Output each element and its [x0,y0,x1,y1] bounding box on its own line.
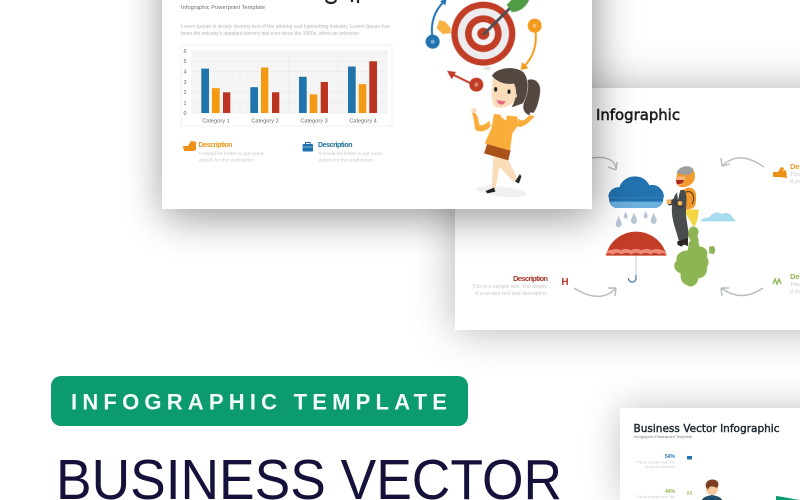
description: red left: Description [513,274,548,283]
slide heading fragment [326,0,358,3]
marker 3: orange [521,19,542,70]
character: girl [471,68,540,199]
description: red left: This is a sample text. You simply [472,284,547,290]
stat: 44 percent [637,489,676,499]
icon: green people [773,279,781,284]
description: red left: d your own text and description [475,291,547,297]
description: orange: details for this stuff better. [199,158,255,164]
slide subtitle: Infographic Powerpoint Template [634,435,692,439]
stat: 54 percent: This is a sample text. You [637,460,675,464]
intro paragraph: Lorem Ipsum is simply dummy text of the printing and typesetting industry. Lorem Ipsum has [181,24,390,30]
skirt [484,143,511,160]
stat: 44 percent: 44% [665,489,676,495]
description: blue: It would be better to put some [318,151,383,157]
axis numbers: 1 [184,101,186,107]
icon: green smoke trail [674,227,709,286]
icon: pale blue cloud [700,212,735,221]
axis numbers: 6 [184,49,186,55]
icon: jetpack man [667,166,696,247]
intro paragraph: been the industry's standard dummy text ever since the 1500s, when an unknown [181,31,359,37]
description: orange right [790,162,800,185]
arrow in target [483,0,520,35]
category labels: Category 1 [202,118,230,124]
icon: target [437,0,530,70]
icon: curved arrow top right [721,158,764,167]
ponytail [523,79,540,115]
bars: orange series [212,68,366,113]
marker 1: blue [426,0,447,49]
bar chart [181,45,392,126]
description: blue: details for this stuff better. [318,158,374,164]
intro paragraph [181,24,390,37]
marker 4: red [447,71,483,92]
description: blue [302,142,383,164]
icon: blue briefcase [687,456,692,460]
panel: slide preview with jetpack man [455,88,800,330]
illustration: cloud, umbrella and jetpack man [605,166,735,286]
icon: curved arrow bottom left [574,288,616,296]
slide subtitle: Infographic Powerpoint Template [181,5,265,11]
description: orange: It would be better to put some [199,151,264,157]
panel: slide preview with bar chart and girl [162,0,592,209]
icon: orange thumbs up [773,167,787,178]
icon: orange thumbs up [183,141,196,151]
description: red left [472,274,548,297]
illustration: target and girl [426,0,542,199]
axis numbers: 4 [184,70,186,76]
axis numbers: 3 [184,80,186,86]
category labels [202,118,377,124]
category labels: Category 3 [300,118,328,124]
axis numbers [184,49,186,117]
stat: 54 percent: simply put text here [646,465,675,469]
axis numbers: 2 [184,90,186,96]
slide heading: Infographic [596,106,680,124]
head [492,78,517,108]
icon: blue briefcase [302,142,313,152]
icon: red umbrella [605,232,667,282]
icon: red figures: H [561,277,569,288]
category labels: Category 2 [251,118,279,124]
torso [485,114,518,151]
description: orange [183,141,264,164]
icon: curved arrow top left [592,158,617,170]
icon: rain cloud [608,176,664,227]
bars: blue series [201,66,356,113]
badge: infographic template: INFOGRAPHIC TEMPLATE [71,390,447,414]
axis numbers: 5 [184,59,186,65]
stat: 54 percent [637,454,676,469]
stat: 44 percent: This is a sample text. You [637,495,675,499]
icon: jetpack flame [683,209,699,227]
icon: green people [688,491,691,495]
description: orange: Description [198,142,232,149]
icon: curved arrow bottom right [721,288,763,296]
character: businessman [702,480,722,500]
teal shape [776,496,800,500]
category labels: Category 4 [349,118,377,124]
arms [471,110,491,131]
description: green right [790,272,800,295]
panel: slide preview bottom right [620,408,800,500]
stat: 54 percent: 54% [665,454,676,460]
axis numbers: 0 [184,111,186,117]
legs [492,156,517,188]
description: blue: Description [318,142,352,149]
badge: infographic template [51,376,468,426]
slide heading: Business Vector Infographic [634,422,780,435]
bars: red series [223,61,377,113]
